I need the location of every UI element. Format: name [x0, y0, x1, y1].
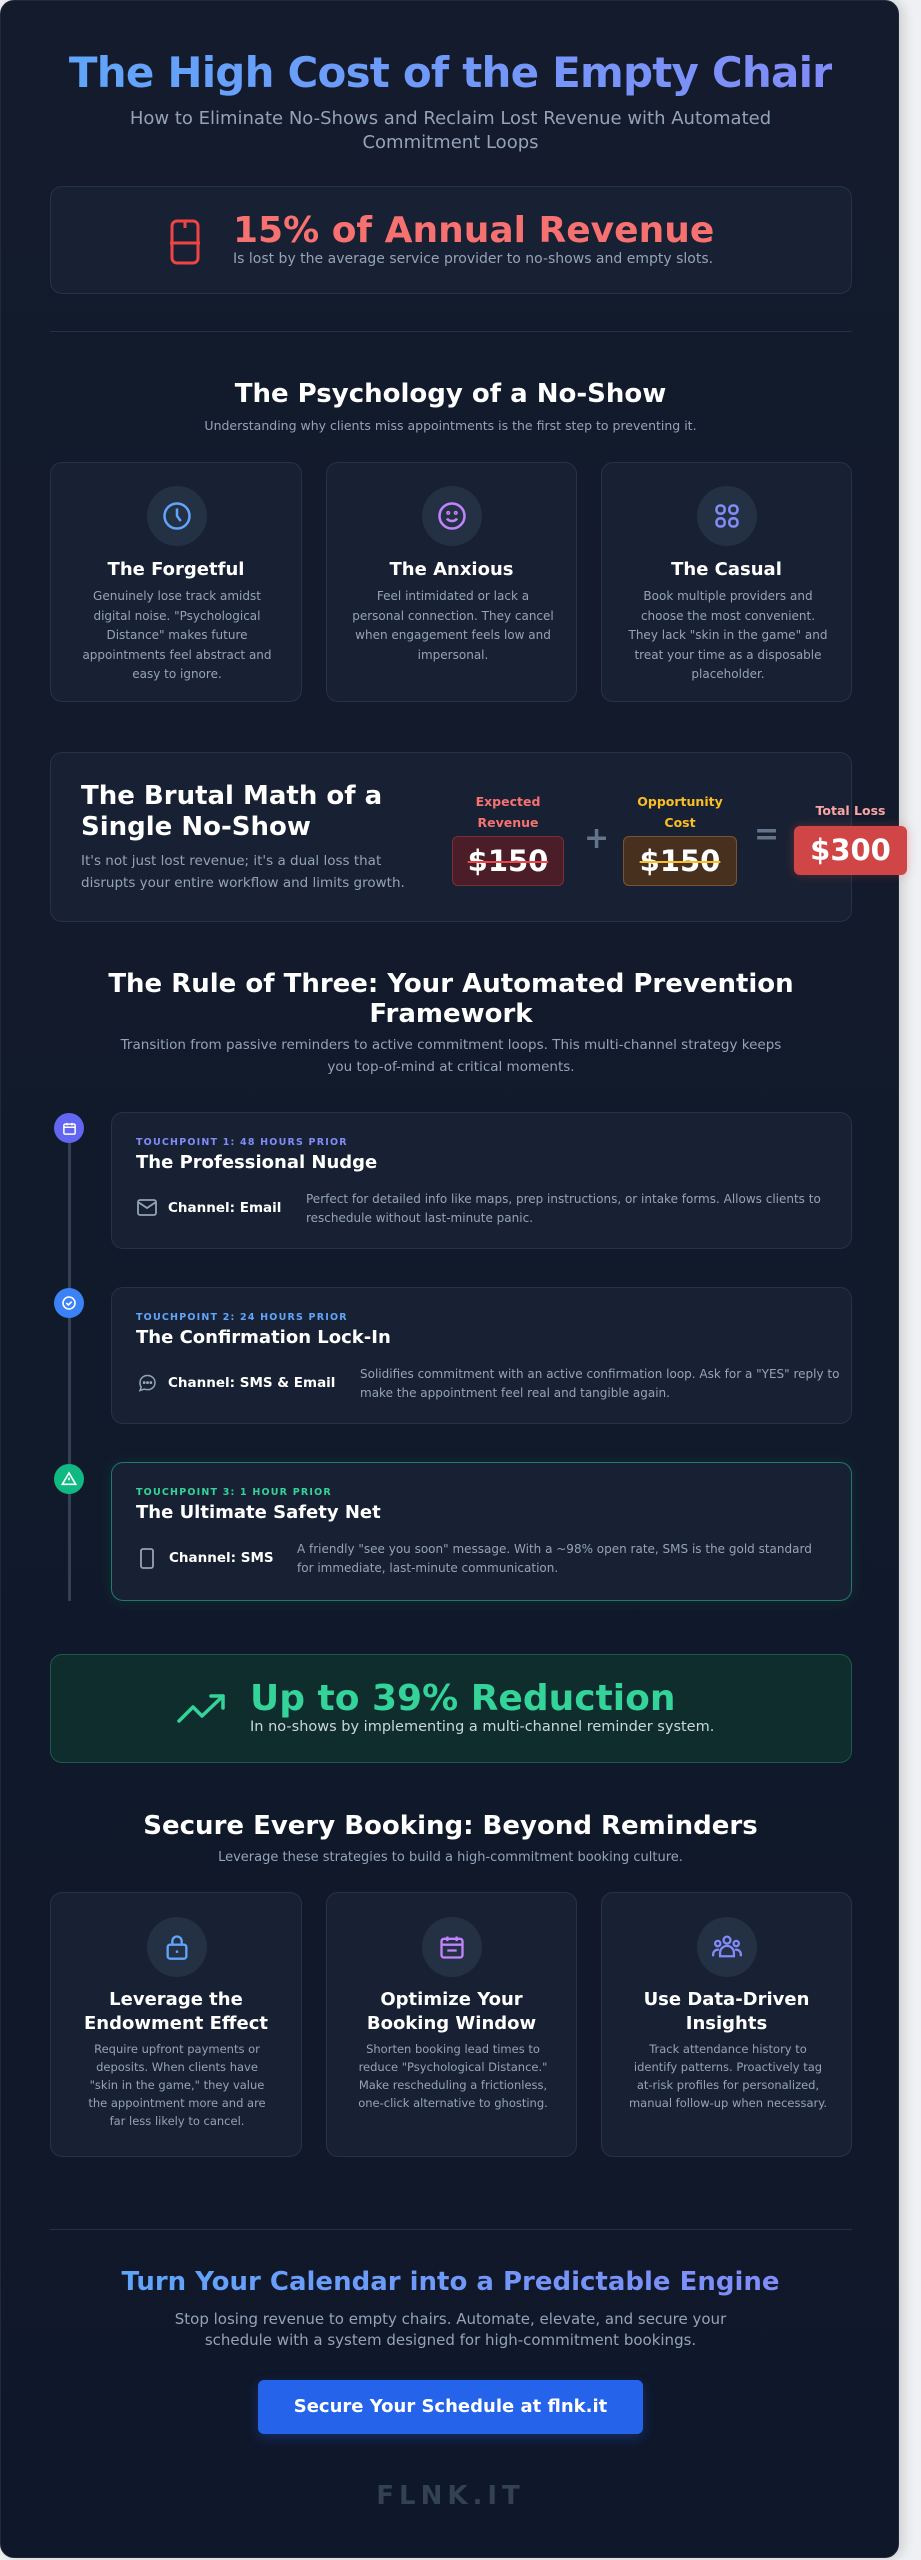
- callout: 39% reduction: In no-shows by implementing a multi-channel reminder system.: [250, 1719, 714, 1735]
- math heading: The Brutal Math of a Single No-Show: [81, 781, 382, 842]
- panel: touchpoint 2: [111, 1287, 852, 1424]
- panel: anxious: Feel intimidated or lack a personal connection. They cancel when engagement feels low and impersonal.: [352, 589, 554, 662]
- panel: touchpoint 2: The Confirmation Lock-In: [136, 1327, 391, 1348]
- panel: forgetful: The Forgetful: [108, 559, 244, 580]
- panel: data insights: [601, 1892, 852, 2157]
- CTA desc: Stop losing revenue to empty chairs. Automate, elevate, and secure your schedule with a system designed for high-commitment bookings.: [175, 2310, 726, 2349]
- panel: touchpoint 3: A friendly "see you soon" message. With a ~98% open rate, SMS is the gold standard for immediate, last-minute communication.: [297, 1542, 812, 1574]
- heading: psychology: The Psychology of a No-Show: [235, 379, 666, 409]
- expected revenue: [452, 794, 564, 886]
- panel: touchpoint 1: [111, 1112, 852, 1249]
- stat text: 15% of Annual Revenue: [233, 210, 714, 251]
- equals: =: [754, 817, 779, 852]
- opportunity cost: Opportunity: [637, 794, 723, 809]
- icon: grid: [697, 486, 757, 546]
- panel: booking window: Shorten booking lead times to reduce "Psychological Distance." Make rescheduling a frictionless, one-click alternative to ghosting.: [358, 2042, 548, 2110]
- panel: anxious: [326, 462, 577, 702]
- icon: timeline dot 2: [54, 1288, 84, 1318]
- button: Secure Your Schedule at flnk.it: [294, 2396, 607, 2417]
- heading: secure every booking: Secure Every Booking: Beyond Reminders: [143, 1811, 758, 1841]
- icon: calendar: [422, 1917, 482, 1977]
- title: The High Cost of the Empty Chair: [69, 48, 832, 97]
- callout: 39% reduction: Up to 39% Reduction: [250, 1678, 676, 1719]
- panel: casual: [601, 462, 852, 702]
- panel: booking window: Optimize Your: [380, 1989, 523, 2010]
- heading: rule of three: The Rule of Three: Your Automated Prevention Framework: [108, 969, 794, 1029]
- icon: chair: [170, 220, 200, 264]
- expected revenue: Revenue: [477, 815, 538, 830]
- icon: timeline dot 3: [54, 1464, 84, 1494]
- expected revenue: Expected: [476, 794, 540, 809]
- panel: touchpoint 2: Channel: SMS & Email: [168, 1375, 335, 1391]
- stat box: 15% revenue: Is lost by the average service provider to no-shows and empty slots.: [233, 251, 713, 267]
- panel: touchpoint 1: Channel: Email: [168, 1200, 281, 1216]
- panel: endowment: Require upfront payments or deposits. When clients have "skin in the game," they value the appointment more and are far less likely to cancel.: [88, 2042, 266, 2128]
- panel: touchpoint 1: TOUCHPOINT 1: 48 HOURS PRIOR: [136, 1137, 348, 1148]
- panel: touchpoint 2: TOUCHPOINT 2: 24 HOURS PRIOR: [136, 1312, 348, 1323]
- panel: data insights: Insights: [686, 2012, 767, 2034]
- total loss: [788, 803, 912, 880]
- panel: endowment: [50, 1892, 302, 2157]
- opportunity cost: [623, 794, 737, 886]
- panel: casual: Book multiple providers and choose the most convenient. They lack "skin in the game" and treat your time as a disposable placeholder.: [628, 589, 827, 681]
- icon: trending up: [177, 1694, 225, 1723]
- secure subheading: Leverage these strategies to build a high-commitment booking culture.: [218, 1850, 683, 1865]
- panel: endowment: Leverage the: [109, 1989, 243, 2010]
- rule of three desc: Transition from passive reminders to active commitment loops. This multi-channel strategy keeps you top-of-mind at critical moments.: [121, 1037, 781, 1074]
- panel: data insights: Use Data-Driven: [644, 1989, 809, 2010]
- subtitle: How to Eliminate No-Shows and Reclaim Lost Revenue with Automated Commitment Loops: [130, 108, 771, 153]
- button: [258, 2380, 643, 2434]
- panel: touchpoint 1: The Professional Nudge: [136, 1152, 377, 1173]
- callout: 39% reduction: [50, 1654, 852, 1763]
- panel: booking window: Booking Window: [367, 2012, 536, 2034]
- panel: touchpoint 3: [111, 1462, 852, 1601]
- icon: smile: [422, 486, 482, 546]
- panel: touchpoint 3: The Ultimate Safety Net: [136, 1502, 381, 1523]
- panel: endowment: Endowment Effect: [84, 2012, 268, 2034]
- panel: anxious: The Anxious: [390, 559, 514, 580]
- footer logo: FLNK.IT: [376, 2481, 525, 2511]
- subheading: Understanding why clients miss appointments is the first step to preventing it.: [204, 418, 697, 433]
- opportunity cost: $150: [640, 844, 720, 878]
- plus: +: [584, 821, 609, 856]
- icon: email: [137, 1199, 157, 1216]
- stat box: 15% revenue: [50, 186, 852, 294]
- panel: booking window: [326, 1892, 577, 2157]
- panel: forgetful: [50, 462, 302, 702]
- icon: phone: [140, 1548, 154, 1569]
- panel: touchpoint 1: Perfect for detailed info like maps, prep instructions, or intake forms. Allows clients to reschedule without last-minute panic.: [306, 1192, 821, 1224]
- expected revenue: $150: [468, 844, 548, 878]
- total loss: $300: [810, 833, 891, 867]
- heading: CTA: Turn Your Calendar into a Predictable Engine: [121, 2267, 780, 2297]
- panel: casual: The Casual: [671, 559, 782, 580]
- panel: brutal math: [50, 752, 852, 922]
- panel: data insights: Track attendance history to identify patterns. Proactively tag at-risk profiles for personalized, manual follow-up when necessary.: [629, 2042, 827, 2110]
- panel: forgetful: Genuinely lose track amidst digital noise. "Psychological Distance" makes future appointments feel abstract and easy to ignore.: [82, 589, 272, 681]
- icon: chat: [138, 1374, 156, 1392]
- icon: users: [697, 1917, 757, 1977]
- panel: touchpoint 3: TOUCHPOINT 3: 1 HOUR PRIOR: [136, 1487, 332, 1498]
- panel: touchpoint 2: Solidifies commitment with an active confirmation loop. Ask for a "YES" reply to make the appointment feel real and tangible again.: [360, 1367, 839, 1400]
- opportunity cost: Cost: [664, 815, 696, 830]
- panel: touchpoint 3: Channel: SMS: [169, 1550, 274, 1566]
- icon: clock: [147, 486, 207, 546]
- math desc: It's not just lost revenue; it's a dual loss that disrupts your entire workflow and limits growth.: [81, 853, 405, 891]
- icon: lock: [147, 1917, 207, 1977]
- icon: timeline dot 1: [54, 1113, 84, 1143]
- total loss: Total Loss: [816, 803, 885, 818]
